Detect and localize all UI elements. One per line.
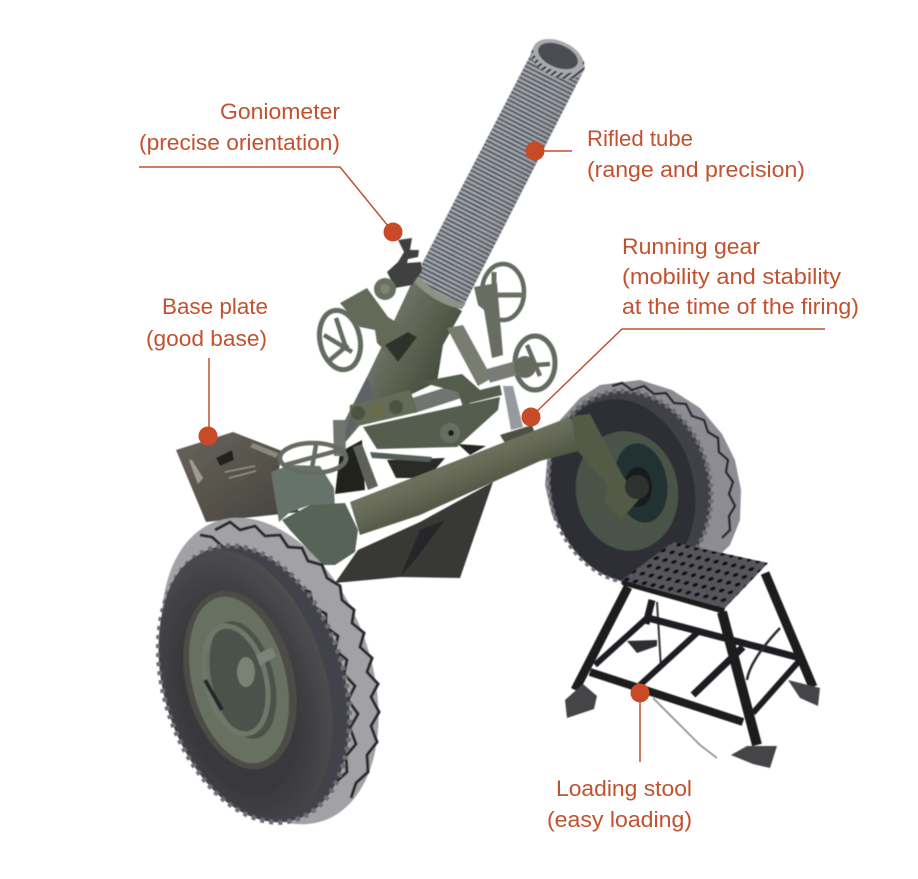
lower right handwheel <box>515 336 555 390</box>
right column and upper handwheel <box>474 264 526 358</box>
goniometer <box>374 238 422 300</box>
support strut <box>503 386 523 430</box>
barrel housing <box>343 280 462 445</box>
label: base plate: (good base) <box>146 326 267 351</box>
label: rifled tube: Rifled tube <box>587 126 693 151</box>
photo: mortar and loading stool <box>122 32 820 855</box>
axle tube <box>350 418 582 535</box>
rifled tube <box>413 32 590 309</box>
knuckle <box>350 390 418 426</box>
label: running gear: Running gear <box>622 234 761 259</box>
under-carriage parts <box>335 440 486 494</box>
label: rifled tube: (range and precision) <box>587 157 805 182</box>
rear wheel <box>529 374 741 600</box>
horizontal bars <box>412 356 536 410</box>
label: running gear: at the time of the firing) <box>622 294 859 319</box>
left drum and handwheel <box>314 288 417 374</box>
gear box and lower handwheel <box>271 420 346 522</box>
label: loading stool: Loading stool <box>556 776 692 801</box>
label: goniometer: (precise orientation) <box>139 130 340 155</box>
label: base plate: Base plate <box>162 294 268 319</box>
label: running gear: (mobility and stability <box>622 264 842 289</box>
label: loading stool <box>547 684 692 832</box>
swing plate <box>363 397 500 449</box>
label: rifled tube <box>526 126 805 182</box>
label: loading stool: (easy loading) <box>547 807 692 832</box>
label: goniometer: Goniometer <box>220 99 341 124</box>
front wheel <box>122 487 418 855</box>
label: base plate <box>146 294 268 446</box>
axle arm <box>571 414 640 520</box>
loading stool <box>565 542 820 768</box>
label: running gear <box>522 234 859 426</box>
elbow hub <box>282 503 358 565</box>
piston <box>447 325 492 386</box>
base plate <box>176 432 300 522</box>
spade plate <box>335 482 493 583</box>
label: goniometer <box>139 99 402 242</box>
